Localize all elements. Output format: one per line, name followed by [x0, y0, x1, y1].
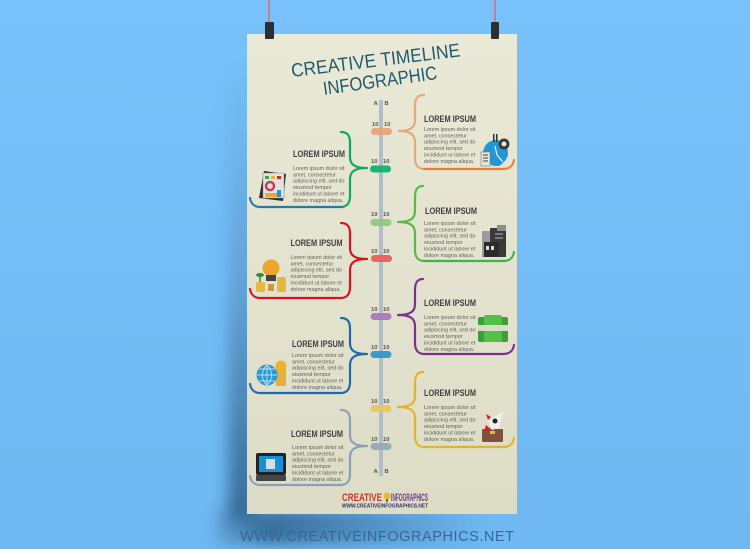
panel: left 1 green: dolore magna aliqua.	[293, 198, 343, 204]
panel: right 3 purple: adipiscing elit, sed do	[424, 328, 476, 334]
marker values: 10	[371, 159, 377, 165]
icon: gear clock	[481, 134, 508, 166]
icon: report sheets	[259, 171, 286, 201]
panel: left 4 slate: LOREM IPSUM	[291, 429, 343, 439]
panel: left 1 green: incididunt ut labore et	[293, 191, 345, 197]
icon: light bulb and coins	[256, 260, 286, 292]
panel: right 3 purple: dolore magna aliqua.	[424, 347, 474, 353]
axis labels bottom: B	[384, 469, 389, 475]
central timeline bar	[379, 100, 383, 476]
footer url: WWW.CREATIVEINFOGRAPHICS.NET	[240, 529, 514, 545]
panel: right 4 yellow: incididunt ut labore et	[424, 430, 476, 436]
panel: right 3 purple	[398, 279, 514, 354]
poster sheet	[247, 34, 517, 514]
marker values: 10	[384, 122, 390, 128]
marker values: 10	[371, 307, 377, 313]
axis labels top: A	[374, 101, 378, 107]
panel: left 2 red: incididunt ut labore et	[290, 280, 342, 286]
panel: left 4 slate: incididunt ut labore et	[292, 470, 344, 476]
panel: left 2 red: LOREM IPSUM	[290, 238, 342, 248]
panel: left 3 blue	[250, 318, 367, 393]
panel: left 1 green	[250, 132, 367, 207]
panel: right 4 yellow: eiusmod tempor	[424, 424, 463, 430]
panel: right 1 orange: eiusmod tempor	[424, 146, 463, 152]
panel: right 4 yellow: Lorem ipsum dolor sit	[424, 405, 476, 411]
logo: WWW.CREATIVEINFOGRAPHICS.NET	[342, 504, 429, 510]
panel: right 1 orange: LOREM IPSUM	[424, 114, 476, 124]
marker values: 10	[371, 212, 377, 218]
title	[290, 40, 461, 100]
panel: left 2 red: dolore magna aliqua.	[290, 287, 341, 293]
icon: rocket and briefcase	[482, 412, 503, 442]
panel: left 4 slate: eiusmod tempor	[292, 464, 331, 470]
panel: right 2 green: adipiscing elit, sed do	[424, 234, 476, 240]
panel: left 2 red: adipiscing elit, sed do	[290, 268, 342, 274]
panel: left 2 red: eiusmod tempor	[290, 274, 329, 280]
panel: right 1 orange: incididunt ut labore et	[424, 152, 476, 158]
panel: right 4 yellow	[398, 372, 514, 447]
panel: right 2 green: Lorem ipsum dolor sit	[424, 221, 476, 227]
panel: right 2 green: amet, consectetur	[424, 227, 467, 233]
marker values: 10	[371, 345, 377, 351]
marker values: 10	[372, 122, 378, 128]
panel: left 1 green: LOREM IPSUM	[293, 149, 345, 159]
panel: left 3 blue: LOREM IPSUM	[292, 339, 344, 349]
panel: left 2 red	[250, 223, 367, 298]
logo: CREATIVE	[342, 492, 382, 504]
panel: right 4 yellow: adipiscing elit, sed do	[424, 418, 476, 424]
panel: right 2 green: incididunt ut labore et	[424, 246, 476, 252]
timeline markers	[370, 128, 392, 450]
panel: left 4 slate: adipiscing elit, sed do	[292, 458, 344, 464]
marker values: 10	[371, 437, 377, 443]
panel: right 1 orange	[399, 95, 514, 169]
panel: right 2 green	[398, 186, 514, 261]
panel: right 3 purple: eiusmod tempor	[424, 334, 463, 340]
panel: left 4 slate: Lorem ipsum dolor sit	[292, 445, 344, 451]
axis labels bottom: A	[374, 469, 378, 475]
panel: left 4 slate	[250, 410, 367, 485]
panel: right 4 yellow: dolore magna aliqua.	[424, 437, 474, 443]
panel: right 1 orange: amet, consectetur	[424, 133, 467, 139]
panel: left 2 red: Lorem ipsum dolor sit	[290, 255, 343, 261]
panel: left 3 blue: dolore magna aliqua.	[292, 385, 342, 391]
panel: left 4 slate: amet, consectetur	[292, 451, 335, 457]
panel: right 2 green: dolore magna aliqua.	[424, 253, 474, 259]
logo	[342, 492, 429, 510]
icon: buildings	[482, 225, 506, 257]
panel: left 3 blue: Lorem ipsum dolor sit	[292, 353, 344, 359]
panel: left 2 red: amet, consectetur	[290, 261, 334, 267]
marker values: 10	[383, 307, 389, 313]
title: INFOGRAPHIC	[322, 63, 439, 100]
marker values: 10	[371, 249, 377, 255]
panel: left 3 blue: adipiscing elit, sed do	[292, 366, 344, 372]
panel: right 3 purple: LOREM IPSUM	[424, 298, 476, 308]
icon: laptop	[256, 453, 286, 481]
panel: left 3 blue: amet, consectetur	[292, 359, 335, 365]
panel: right 1 orange: adipiscing elit, sed do	[424, 140, 476, 146]
title: CREATIVE TIMELINE	[290, 40, 461, 82]
marker values: 10	[383, 345, 389, 351]
panel: right 2 green: LOREM IPSUM	[425, 206, 477, 216]
panel: right 4 yellow: LOREM IPSUM	[424, 388, 476, 398]
panel: left 1 green: Lorem ipsum dolor sit	[293, 166, 345, 172]
icon: globe and coins	[256, 360, 286, 386]
panel: left 4 slate: dolore magna aliqua.	[292, 477, 342, 483]
marker values: 10	[383, 399, 389, 405]
marker values: 10	[371, 399, 377, 405]
marker values: 10	[383, 437, 389, 443]
clips	[265, 22, 499, 39]
marker values: 10	[383, 159, 389, 165]
marker values: 10	[383, 212, 389, 218]
panel: right 2 green: eiusmod tempor	[424, 240, 463, 246]
text: INFOGRAPHICS	[391, 492, 428, 504]
panel: right 3 purple: amet, consectetur	[424, 321, 467, 327]
poster shadow	[215, 70, 485, 544]
axis labels top: B	[384, 101, 389, 107]
panel: left 3 blue: incididunt ut labore et	[292, 378, 344, 384]
panel: right 3 purple: incididunt ut labore et	[424, 340, 476, 346]
marker values: 10	[383, 249, 389, 255]
panel: left 1 green: amet, consectetur	[293, 172, 336, 178]
panel: left 1 green: eiusmod tempor	[293, 185, 332, 191]
marker values	[371, 122, 390, 443]
panel: left 3 blue: eiusmod tempor	[292, 372, 331, 378]
panel: left 1 green: adipiscing elit, sed do	[293, 179, 345, 185]
axis labels bottom	[374, 469, 389, 475]
hanging strings	[269, 0, 495, 23]
panel: right 4 yellow: amet, consectetur	[424, 411, 467, 417]
icon: money bag	[478, 315, 508, 342]
panel: right 1 orange: Lorem ipsum dolor sit	[424, 127, 476, 133]
panel: right 1 orange: dolore magna aliqua.	[424, 159, 474, 165]
axis labels top	[374, 101, 389, 107]
panel: right 3 purple: Lorem ipsum dolor sit	[424, 315, 476, 321]
